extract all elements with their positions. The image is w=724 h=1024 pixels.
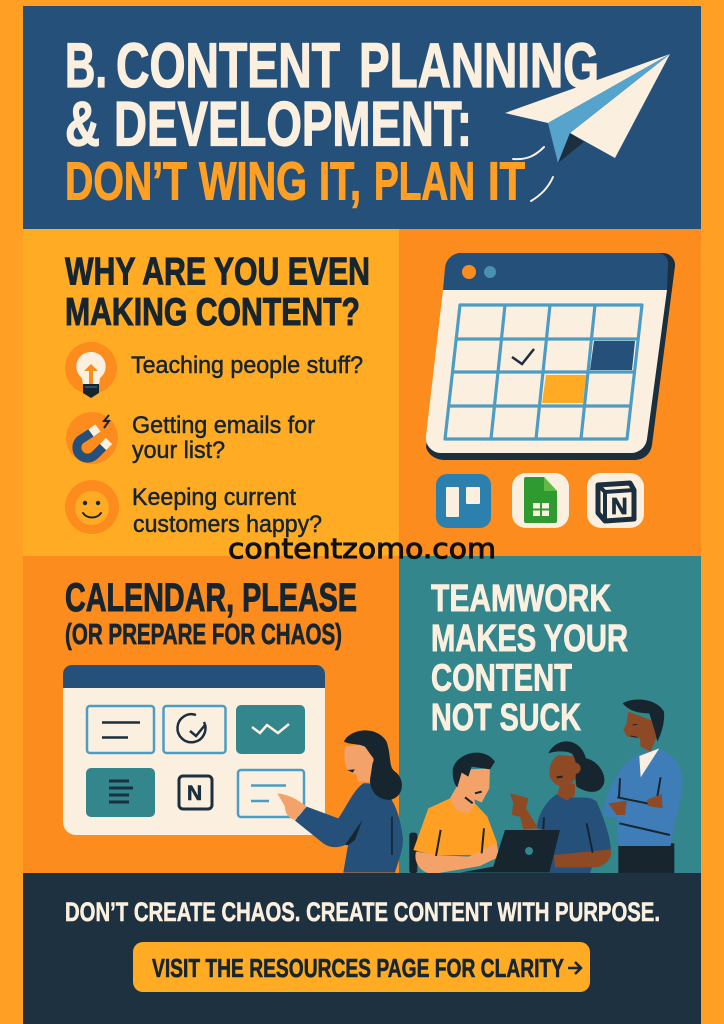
icon: google sheets — [512, 473, 569, 528]
subtitle: IT — [488, 152, 525, 212]
heading: CALENDAR, PLEASE — [65, 576, 357, 620]
list text: emails — [132, 412, 315, 464]
man with crossed arms — [604, 700, 683, 875]
panel: teamwork — [399, 556, 701, 875]
laptop — [460, 830, 560, 873]
icon: notion: N — [611, 493, 628, 519]
subheading: (OR PREPARE FOR CHAOS) — [65, 619, 342, 651]
icon: magnet — [66, 412, 118, 464]
illustration: woman presenting — [277, 730, 403, 873]
button — [133, 942, 590, 992]
list text: customers: Keeping current — [132, 484, 296, 511]
icon: trello — [436, 474, 491, 528]
title: CONTENT — [116, 31, 340, 101]
heading — [431, 578, 628, 739]
heading: MAKES YOUR — [431, 618, 628, 660]
watermark: contentzomo.com — [228, 532, 496, 565]
heading: MAKING CONTENT? — [65, 291, 360, 334]
list text: teaching: Teaching people stuff? — [131, 352, 363, 379]
heading: TEAMWORK — [431, 578, 611, 620]
illustration: planner board: N — [187, 782, 202, 805]
panel: footer — [23, 873, 701, 1024]
button: VISIT THE RESOURCES PAGE FOR CLARITY — [152, 953, 564, 983]
panel: header — [23, 6, 701, 229]
icon: paper plane — [505, 54, 670, 201]
heading: WHY ARE YOU EVEN — [65, 250, 370, 294]
title: PLANNING — [359, 31, 599, 101]
panel: calendar please — [23, 556, 399, 873]
illustration: calendar — [426, 253, 675, 460]
icon: light bulb — [65, 342, 117, 398]
icon: arrow — [568, 962, 581, 974]
icon: notion — [587, 473, 644, 528]
panel: calendar tools — [399, 229, 701, 556]
title: DEVELOPMENT: — [114, 90, 472, 160]
subtitle: WING — [199, 152, 307, 212]
heading: NOT SUCK — [431, 697, 581, 739]
list text: emails: Getting emails for — [132, 412, 315, 439]
subtitle: PLAN — [374, 152, 475, 212]
panel: why are you making content — [23, 229, 399, 556]
subtitle: IT, — [319, 152, 361, 212]
illustration: planner board — [63, 665, 325, 835]
illustration: team at laptop — [409, 700, 683, 875]
title: & — [65, 90, 100, 160]
heading: CONTENT — [431, 658, 572, 700]
man in orange shirt — [413, 753, 499, 874]
list text: customers: customers happy? — [133, 511, 322, 538]
list text: emails: your list? — [132, 437, 225, 464]
heading — [65, 250, 370, 334]
woman pointing — [510, 741, 611, 873]
title: B. — [65, 31, 107, 101]
subtitle — [65, 152, 525, 212]
title — [65, 31, 599, 160]
icon: smiley — [65, 480, 119, 534]
subtitle: DON’T — [65, 152, 187, 212]
chair — [409, 833, 417, 873]
list text: customers — [132, 484, 322, 538]
